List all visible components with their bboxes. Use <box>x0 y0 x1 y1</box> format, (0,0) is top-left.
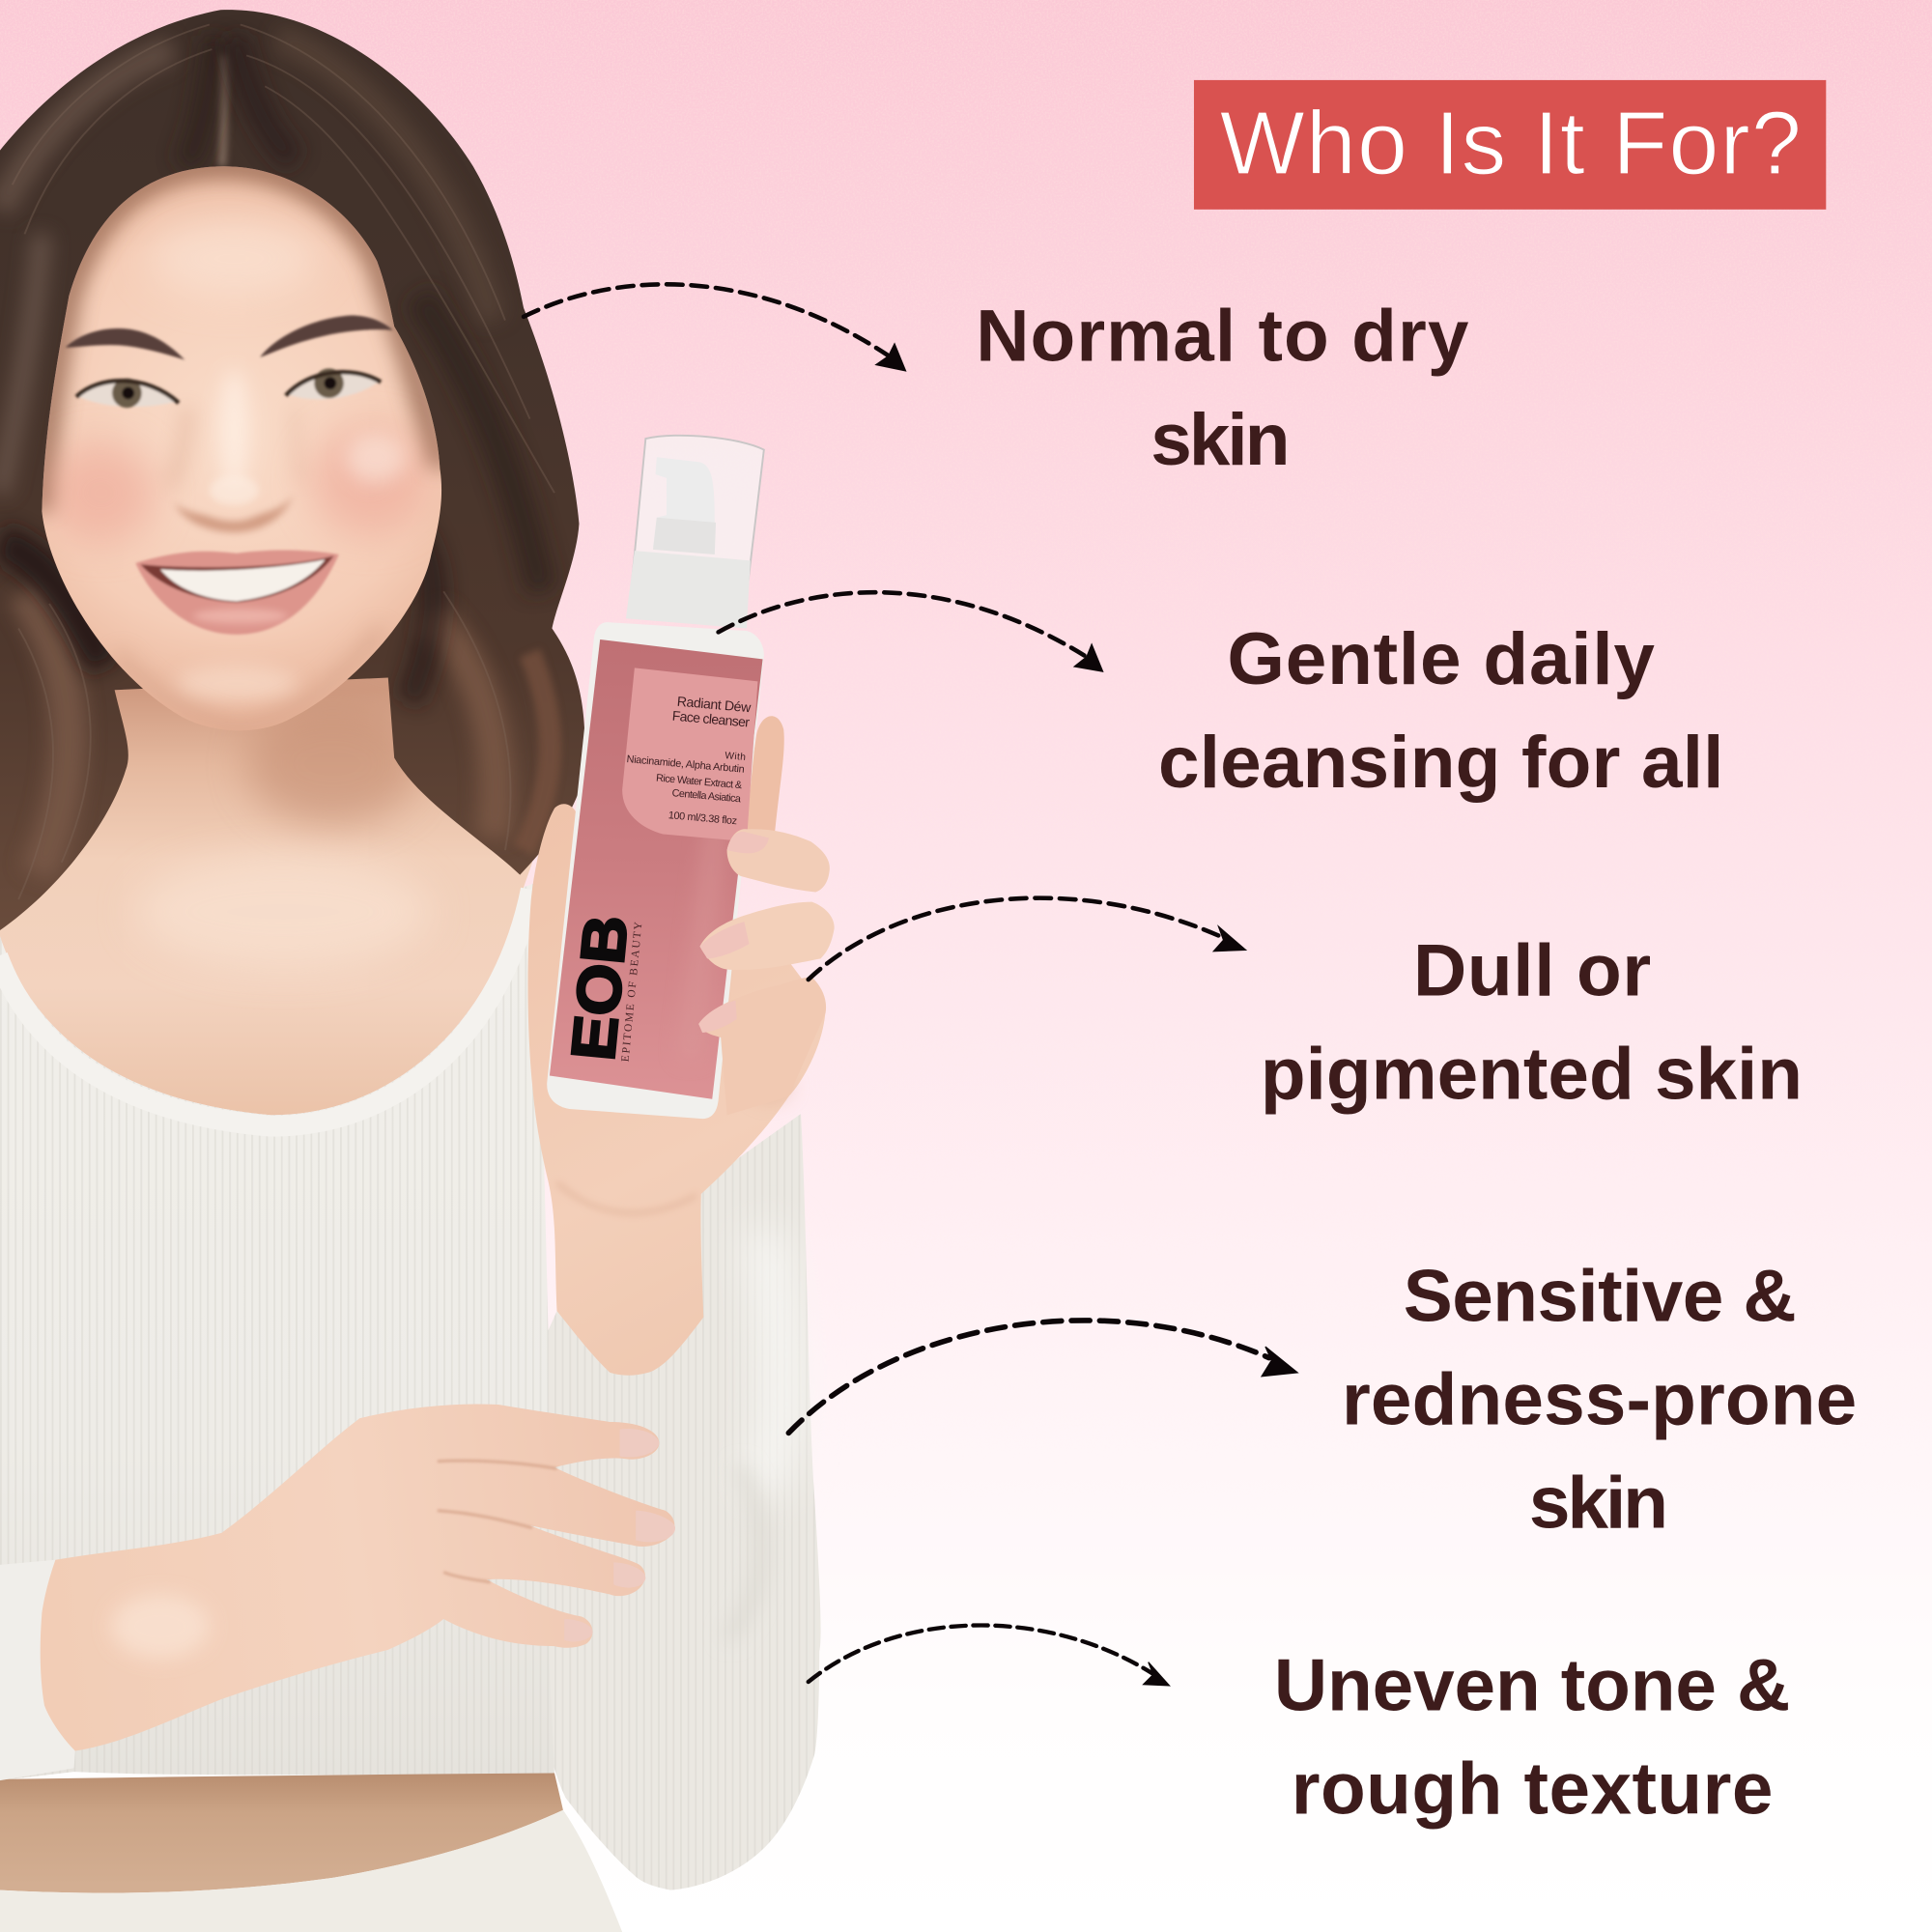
text: Sensitive and redness-prone skin: redness-prone <box>1342 1358 1857 1440</box>
sleeve of raised arm <box>545 1114 821 1890</box>
bottle <box>547 436 764 1119</box>
arrow 2 to gentle daily cleansing <box>719 592 1103 671</box>
text: Gentle daily cleansing for all: Gentle daily <box>1227 618 1655 700</box>
product text on label: Rice Water Extract & <box>656 773 743 791</box>
text: Normal to dry skin: Normal to dry <box>976 296 1469 378</box>
product text on label <box>626 694 753 827</box>
arrow 3 to dull or pigmented skin <box>809 898 1246 980</box>
EOB logo: EOB <box>557 912 641 1064</box>
neck and chest skin <box>0 640 532 1115</box>
face <box>42 166 441 730</box>
left eye <box>76 379 179 408</box>
hand on waist <box>41 1404 675 1750</box>
text: Dull or pigmented skin: Dull or <box>1413 930 1651 1012</box>
text: Gentle daily cleansing for all <box>1158 618 1723 804</box>
right eyebrow <box>260 316 393 357</box>
text: Uneven tone and rough texture: rough texture <box>1292 1748 1773 1831</box>
product text on label: Centella Asiatica <box>671 787 742 805</box>
model figure holding product <box>0 10 835 1932</box>
left eyebrow <box>66 328 185 359</box>
clear cap <box>631 436 764 594</box>
pump collar <box>626 551 751 629</box>
text: Dull or pigmented skin <box>1261 930 1803 1116</box>
text: Sensitive and redness-prone skin: Sensitive & <box>1404 1255 1797 1337</box>
nose <box>174 475 294 532</box>
smile with teeth <box>135 551 339 635</box>
product text on label: 100 ml/3.38 floz <box>668 810 738 827</box>
lower sleeve cuff on waist arm <box>0 1560 75 1780</box>
text: Normal to dry skin <box>976 296 1469 481</box>
arrow 4 to sensitive skin <box>788 1321 1297 1433</box>
light label panel <box>622 668 757 841</box>
background gradient <box>0 0 1932 1522</box>
text: Dull or pigmented skin: pigmented skin <box>1261 1034 1803 1116</box>
raised hand behind bottle <box>527 716 826 1376</box>
right eye <box>286 368 381 399</box>
text: Sensitive and redness-prone skin: skin <box>1529 1463 1668 1545</box>
text: Normal to dry skin: skin <box>1151 399 1290 481</box>
text: Gentle daily cleansing for all: cleansing for all <box>1158 722 1723 804</box>
pump <box>653 457 715 547</box>
brand tagline: EPITOME OF BEAUTY <box>620 922 644 1063</box>
fingers over bottle <box>698 829 835 1115</box>
text: Uneven tone and rough texture: Uneven tone & <box>1274 1644 1790 1726</box>
nails <box>564 1429 675 1641</box>
pink label <box>550 639 763 1099</box>
arrow 1 to normal to dry skin <box>524 284 906 371</box>
product text on label: Face cleanser <box>671 708 751 730</box>
hair <box>0 10 585 930</box>
text: Sensitive and redness-prone skin <box>1342 1255 1857 1545</box>
product text on label: Radiant Déw <box>676 694 753 715</box>
white waistband <box>0 1810 622 1932</box>
heading: Who Is It For?: Who Is It For? <box>1220 93 1802 193</box>
product text on label: With <box>724 751 746 763</box>
waist skin <box>0 1773 563 1893</box>
product text on label: Niacinamide, Alpha Arbutin <box>626 753 745 776</box>
text: Uneven tone and rough texture <box>1274 1644 1790 1831</box>
white ribbed top <box>0 882 554 1780</box>
bottle body <box>547 622 764 1119</box>
arrow 5 to uneven tone <box>809 1626 1169 1686</box>
